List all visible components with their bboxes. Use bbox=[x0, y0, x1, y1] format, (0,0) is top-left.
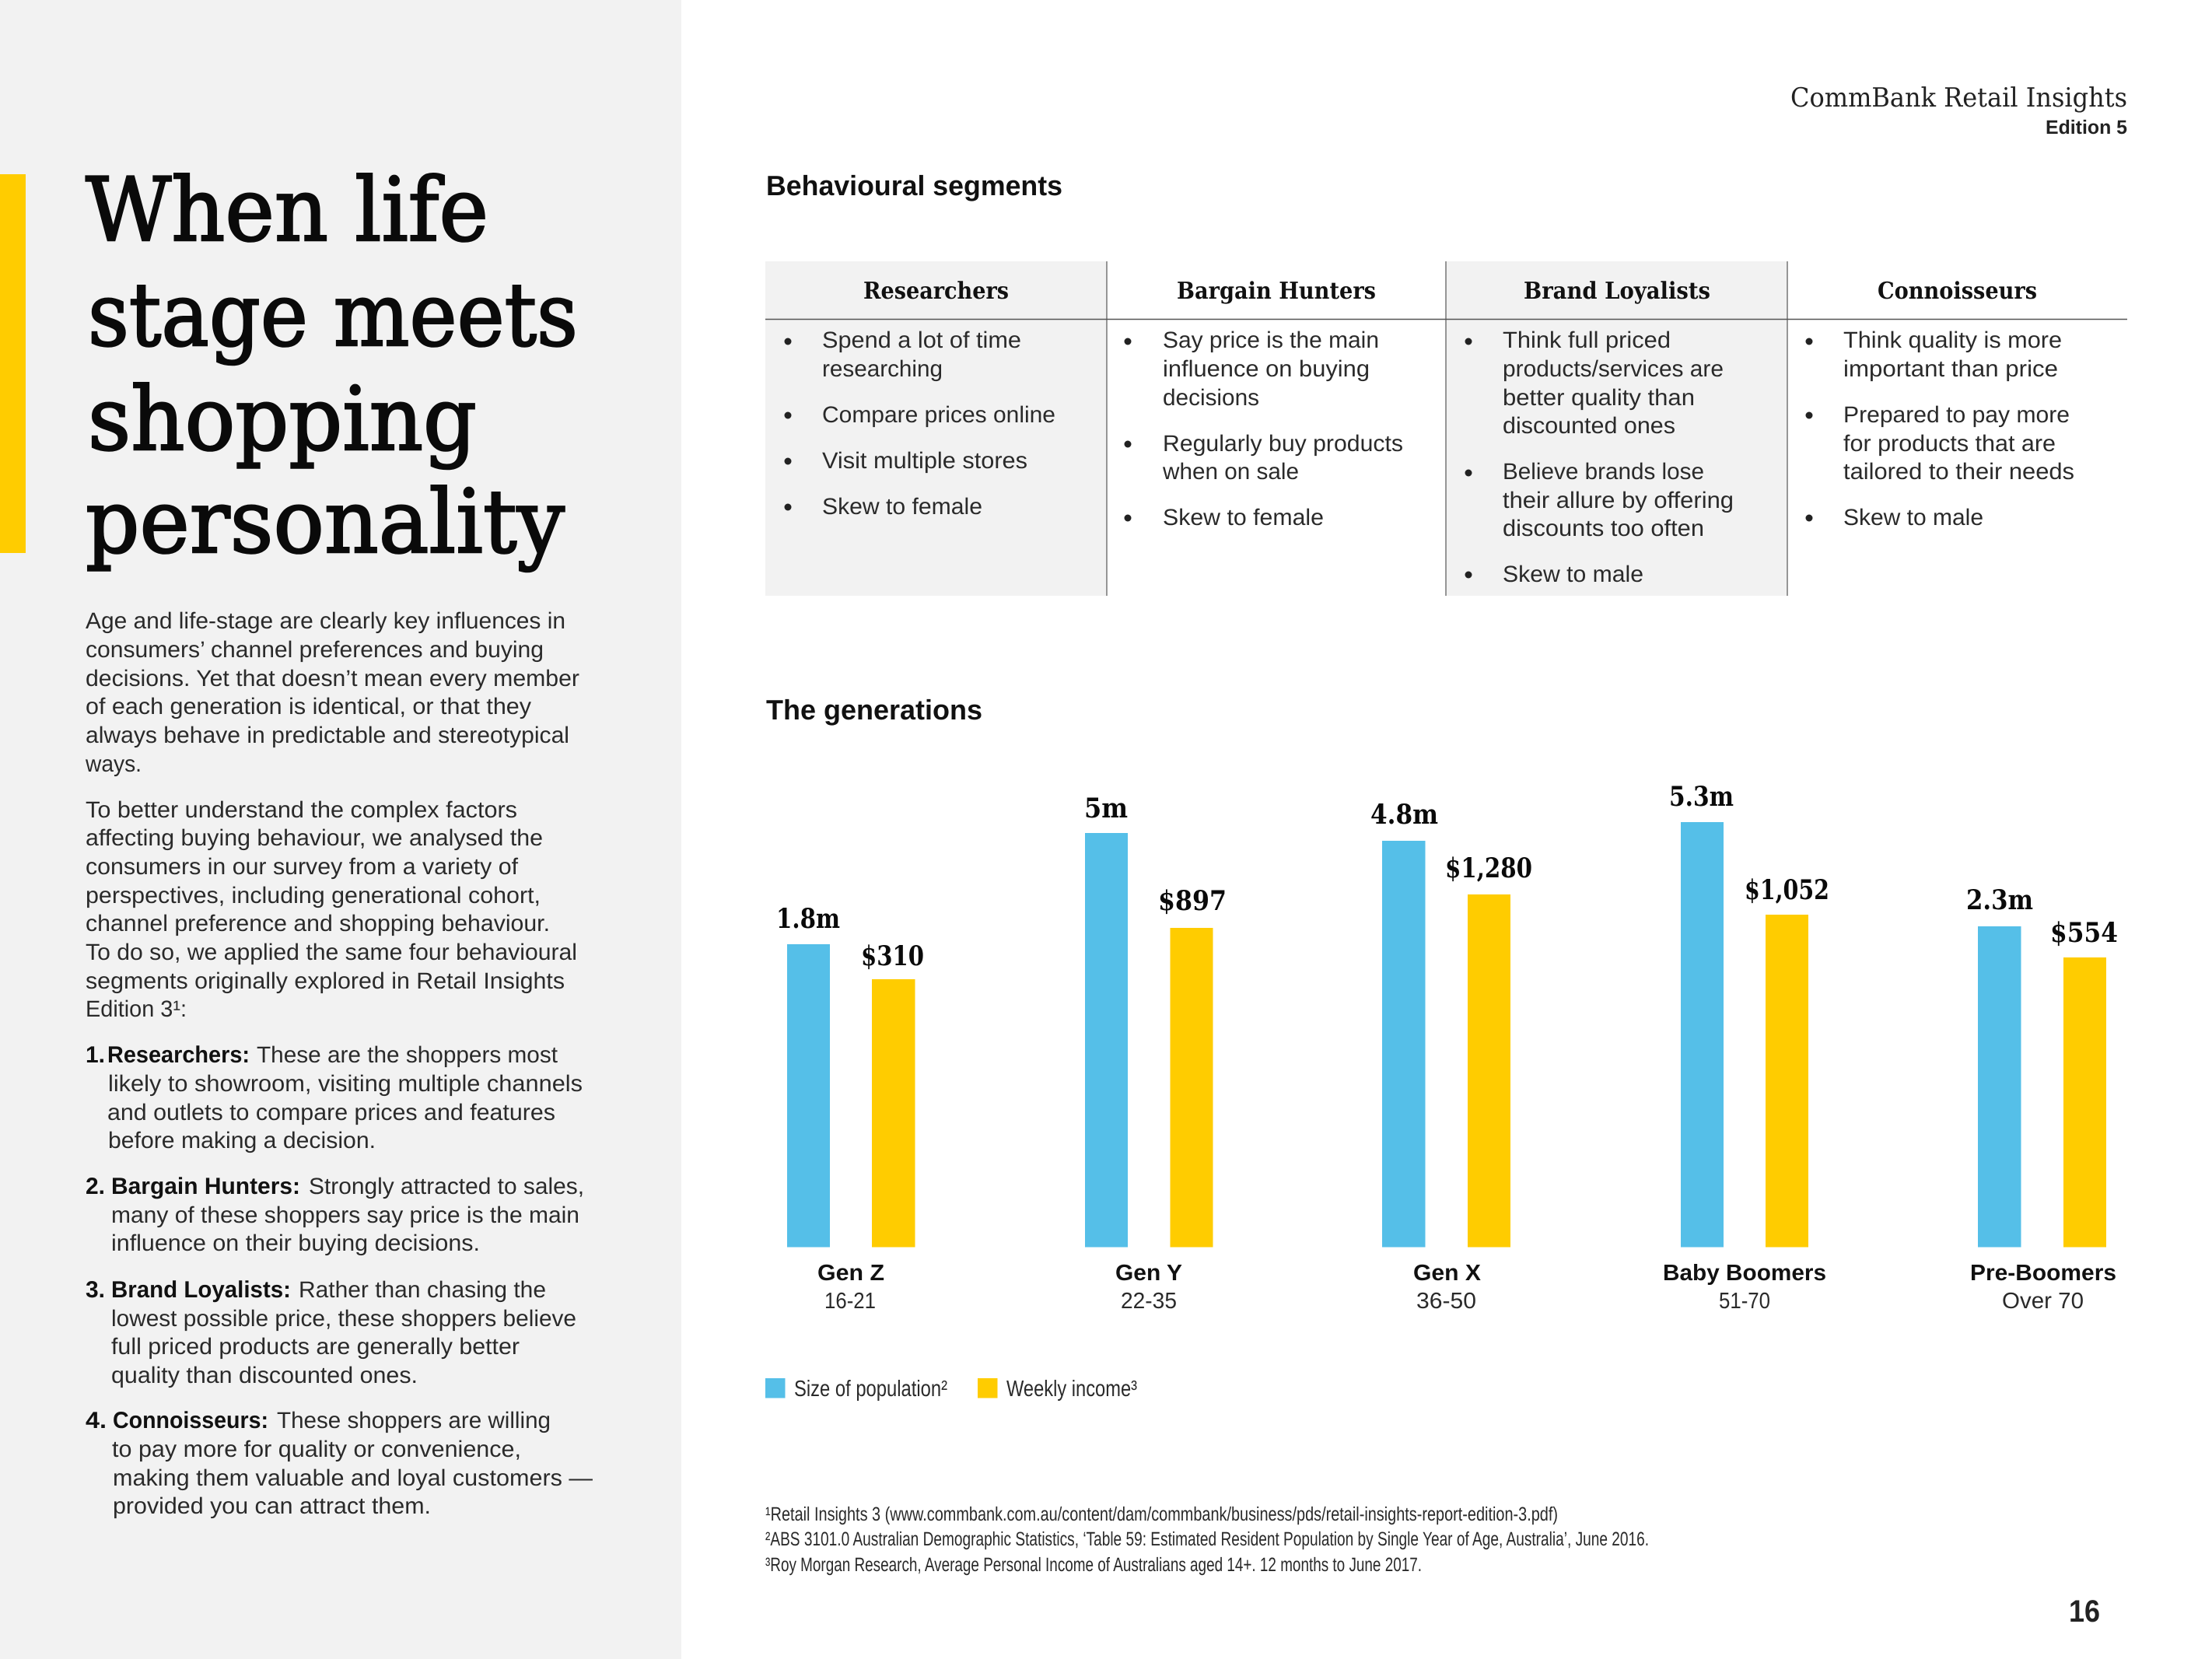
intro paragraph 2 bbox=[86, 797, 577, 1022]
column: Connoisseurs: Skew to male bbox=[1843, 505, 1983, 530]
column: Brand Loyalists: Believe brands lose bbox=[1503, 459, 1704, 485]
column: Bargain Hunters: decisions bbox=[1163, 385, 1259, 411]
title: When life bbox=[86, 159, 488, 261]
header: publication name: Edition 5 bbox=[2046, 117, 2127, 138]
group: Baby Boomers: 51-70 bbox=[1719, 1289, 1770, 1314]
column: Researchers: Visit multiple stores bbox=[822, 448, 1027, 474]
column: Connoisseurs: for products that are bbox=[1843, 431, 2056, 457]
group: Baby Boomers: $1,052 bbox=[1745, 874, 1829, 906]
list item 2: Bargain Hunters: Bargain Hunters: bbox=[111, 1174, 300, 1199]
list item 4: Connoisseurs: making them valuable and loyal customers — bbox=[113, 1465, 593, 1491]
group: Gen Z: 16-21 bbox=[824, 1289, 876, 1314]
group: Pre-Boomers: Over 70 bbox=[2002, 1289, 2084, 1314]
column: Brand Loyalists: better quality than bbox=[1503, 385, 1695, 411]
group: Pre-Boomers: Pre-Boomers bbox=[1970, 1261, 2116, 1286]
column: Researchers: Compare prices online bbox=[822, 402, 1055, 428]
legend: Weekly income³ bbox=[1006, 1377, 1137, 1402]
intro paragraph 2: perspectives, including generational cohort, bbox=[86, 883, 541, 908]
column: Bargain Hunters: Regularly buy products bbox=[1163, 431, 1403, 457]
column: Connoisseurs: important than price bbox=[1843, 356, 2058, 382]
footnotes: ²ABS 3101.0 Australian Demographic Statistics, ‘Table 59: Estimated Resident Population by Single Year of Age, Australia’, June 2016. bbox=[765, 1528, 1649, 1550]
list item 4: Connoisseurs: provided you can attract them. bbox=[113, 1493, 431, 1519]
group: Gen X: 4.8m bbox=[1370, 799, 1438, 831]
column: Brand Loyalists: Skew to male bbox=[1503, 562, 1643, 587]
group: Gen Z: Gen Z bbox=[817, 1261, 884, 1286]
column: Brand Loyalists: products/services are bbox=[1503, 356, 1724, 382]
intro paragraph 1: decisions. Yet that doesn’t mean every member bbox=[86, 666, 579, 691]
group: Gen Z: $310 bbox=[861, 940, 924, 972]
footnotes bbox=[765, 1503, 1649, 1576]
column: Brand Loyalists bbox=[1465, 278, 1734, 587]
title: shopping bbox=[88, 368, 477, 471]
list item 3: Brand Loyalists: Brand Loyalists: bbox=[111, 1277, 291, 1303]
column: Researchers bbox=[784, 278, 1055, 520]
panel: left sidebar bbox=[0, 0, 681, 1659]
column: Researchers: Researchers bbox=[863, 278, 1009, 305]
list item 4: Connoisseurs: Connoisseurs: bbox=[113, 1408, 268, 1433]
column: Bargain Hunters: Bargain Hunters bbox=[1177, 278, 1376, 305]
list item 1: Researchers: and outlets to compare prices and features bbox=[107, 1100, 555, 1125]
title: personality bbox=[86, 471, 565, 573]
list item 4: Connoisseurs: 4. bbox=[86, 1408, 107, 1433]
list item 1: Researchers: likely to showroom, visiting multiple channels bbox=[108, 1071, 583, 1097]
group: Gen Y: $897 bbox=[1158, 885, 1227, 917]
list item 4: Connoisseurs: to pay more for quality or convenience, bbox=[112, 1437, 521, 1462]
column: Bargain Hunters: when on sale bbox=[1162, 459, 1299, 485]
list item 2: Bargain Hunters bbox=[86, 1174, 584, 1256]
intro paragraph 1: of each generation is identical, or that they bbox=[86, 694, 531, 719]
column: Connoisseurs: tailored to their needs bbox=[1843, 459, 2074, 485]
table: behavioural segments bbox=[765, 261, 2127, 596]
column: Bargain Hunters bbox=[1125, 278, 1403, 530]
group: Gen Y: 5m bbox=[1084, 793, 1128, 824]
intro paragraph 2: Edition 3¹: bbox=[86, 996, 187, 1022]
intro paragraph 1: consumers’ channel preferences and buying bbox=[86, 637, 544, 663]
list item 2: Bargain Hunters: many of these shoppers say price is the main bbox=[111, 1202, 579, 1228]
list item 3: Brand Loyalists: quality than discounted ones. bbox=[111, 1363, 418, 1388]
column: Researchers: Spend a lot of time bbox=[822, 327, 1021, 353]
intro paragraph 1: always behave in predictable and stereotypical bbox=[86, 723, 569, 748]
column: Researchers: Skew to female bbox=[822, 494, 982, 520]
group: Gen Y: Gen Y bbox=[1115, 1261, 1182, 1286]
list item 1: Researchers: before making a decision. bbox=[108, 1128, 376, 1153]
list item 1: Researchers: These are the shoppers most bbox=[257, 1042, 558, 1068]
intro paragraph 1: Age and life-stage are clearly key influences in bbox=[86, 608, 565, 634]
column: Bargain Hunters: influence on buying bbox=[1163, 356, 1370, 382]
group: Gen X: 36-50 bbox=[1416, 1289, 1476, 1314]
list item 4: Connoisseurs bbox=[86, 1408, 593, 1519]
list item 2: Bargain Hunters: 2. bbox=[86, 1174, 105, 1199]
column: Connoisseurs: Think quality is more bbox=[1843, 327, 2062, 353]
column: Researchers: researching bbox=[822, 356, 943, 382]
column: Connoisseurs: Connoisseurs bbox=[1878, 278, 2037, 305]
list item 3: Brand Loyalists: lowest possible price, these shoppers believe bbox=[111, 1306, 576, 1332]
intro paragraph 2: channel preference and shopping behaviour. bbox=[86, 911, 550, 936]
group: Gen X bbox=[1370, 799, 1532, 1314]
list item 2: Bargain Hunters: influence on their buying decisions. bbox=[111, 1230, 480, 1256]
column: Bargain Hunters: Skew to female bbox=[1163, 505, 1324, 530]
title bbox=[86, 159, 578, 573]
intro paragraph 2: segments originally explored in Retail Insights bbox=[86, 968, 565, 994]
heading: the generations: The generations bbox=[766, 694, 982, 726]
legend: Size of population² bbox=[794, 1377, 947, 1402]
intro paragraph 2: consumers in our survey from a variety of bbox=[86, 854, 519, 880]
list item 3: Brand Loyalists: Rather than chasing the bbox=[299, 1277, 546, 1303]
list item 1: Researchers: 1. bbox=[86, 1042, 105, 1068]
header: publication name: CommBank Retail Insights bbox=[1790, 82, 2127, 114]
title: stage meets bbox=[88, 264, 578, 366]
group: Gen X: $1,280 bbox=[1445, 852, 1532, 884]
column: Bargain Hunters: Say price is the main bbox=[1163, 327, 1379, 353]
group: Pre-Boomers: $554 bbox=[2050, 917, 2118, 949]
list item 1: Researchers bbox=[86, 1042, 583, 1153]
group: Gen Y bbox=[1084, 793, 1227, 1314]
list item 1: Researchers: Researchers: bbox=[107, 1042, 250, 1068]
footnotes: ³Roy Morgan Research, Average Personal Income of Australians aged 14+. 12 months to June 2017. bbox=[765, 1554, 1422, 1576]
intro paragraph 1 bbox=[85, 608, 579, 777]
column: Connoisseurs: Prepared to pay more bbox=[1843, 402, 2070, 428]
group: Gen X: Gen X bbox=[1413, 1261, 1482, 1286]
bar chart: generations bbox=[776, 781, 2118, 1314]
column: Brand Loyalists: Think full priced bbox=[1503, 327, 1671, 353]
intro paragraph 1: ways. bbox=[85, 751, 142, 777]
group: Baby Boomers: Baby Boomers bbox=[1663, 1261, 1826, 1286]
column: Brand Loyalists: discounted ones bbox=[1503, 413, 1675, 439]
group: Pre-Boomers bbox=[1966, 884, 2118, 1314]
intro paragraph 2: To do so, we applied the same four behavioural bbox=[86, 940, 577, 965]
column: Connoisseurs bbox=[1806, 278, 2074, 530]
column: Brand Loyalists: Brand Loyalists bbox=[1524, 278, 1710, 305]
list item 3: Brand Loyalists: 3. bbox=[86, 1277, 105, 1303]
header: publication name bbox=[1790, 82, 2127, 138]
page number: 16 bbox=[2069, 1594, 2100, 1629]
list item 3: Brand Loyalists: full priced products are generally better bbox=[111, 1334, 520, 1360]
group: Pre-Boomers: 2.3m bbox=[1966, 884, 2033, 916]
group: Gen Y: 22-35 bbox=[1121, 1289, 1177, 1314]
group: Gen Z: 1.8m bbox=[776, 903, 840, 935]
list item 2: Bargain Hunters: Strongly attracted to sales, bbox=[309, 1174, 584, 1199]
list item 3: Brand Loyalists bbox=[86, 1277, 576, 1388]
heading: behavioural segments: Behavioural segments bbox=[766, 170, 1062, 201]
legend bbox=[765, 1377, 1137, 1402]
intro paragraph 2: To better understand the complex factors bbox=[86, 797, 517, 823]
group: Gen Z bbox=[776, 903, 924, 1314]
column: Brand Loyalists: discounts too often bbox=[1503, 516, 1704, 541]
group: Baby Boomers: 5.3m bbox=[1669, 781, 1734, 813]
column: Brand Loyalists: their allure by offering bbox=[1503, 488, 1734, 513]
intro paragraph 2: affecting buying behaviour, we analysed the bbox=[86, 825, 543, 851]
accent bar bbox=[0, 174, 26, 553]
footnotes: ¹Retail Insights 3 (www.commbank.com.au/content/dam/commbank/business/pds/retail-insights-report-edition-3.pdf) bbox=[765, 1503, 1558, 1525]
list item 4: Connoisseurs: These shoppers are willing bbox=[277, 1408, 551, 1433]
group: Baby Boomers bbox=[1663, 781, 1829, 1314]
